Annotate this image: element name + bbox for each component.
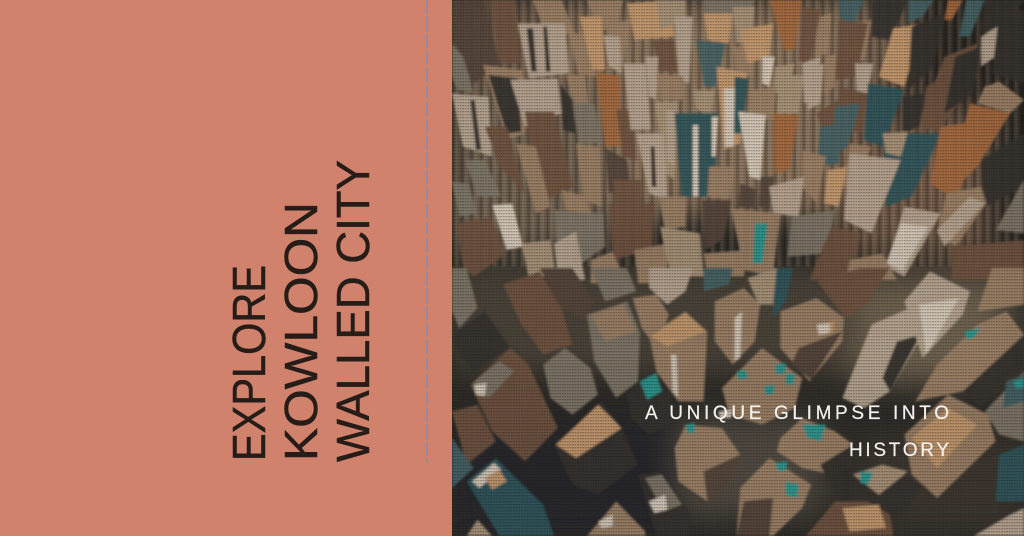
vertical tower streaks in top half — [452, 0, 1024, 267]
subtitle: A unique glimpse into history — [645, 403, 949, 461]
title line 2: KOWLOON — [275, 202, 327, 461]
panel: salmon title panel — [0, 0, 452, 536]
title: Explore Kowloon Walled City — [223, 160, 379, 462]
photo: aerial view of dense high-rise city — [452, 0, 1024, 536]
title line 1: EXPLORE — [223, 265, 275, 461]
title line 3: WALLED CITY — [327, 160, 379, 462]
subtitle line 1: A UNIQUE GLIMPSE INTO — [645, 403, 949, 424]
tone map — [452, 0, 1024, 536]
dashed vertical divider — [426, 0, 428, 463]
subtitle line 2: HISTORY — [849, 440, 949, 461]
